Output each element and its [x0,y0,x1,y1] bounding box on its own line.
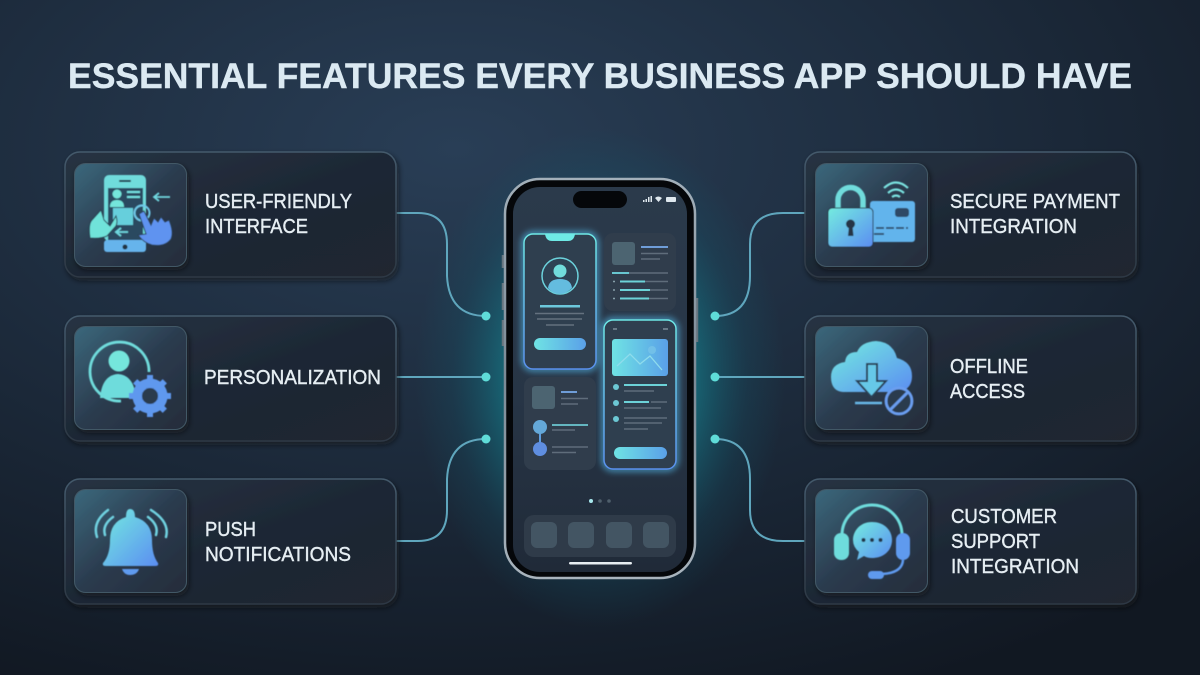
icon tile: user-friendly interface [74,164,186,266]
label: user-friendly interface: USER-FRIENDLY [205,190,352,213]
connector: secure payment [715,213,805,316]
phone body [505,179,695,578]
icon: cloud download offline [831,341,912,414]
panel: secure payment integration [805,152,1136,277]
connector lines [396,213,805,541]
label: user-friendly interface: INTERFACE [205,215,308,238]
ui card: contacts [524,377,596,470]
ui card: profile [524,234,596,369]
panel: offline access [805,316,1136,441]
phone screen [513,187,687,572]
label: push notifications [205,518,351,566]
label: secure payment integration [950,190,1120,238]
panel: customer support integration [805,479,1136,604]
label: offline access: OFFLINE [950,355,1028,378]
ui card: list [604,233,676,311]
connector: personalization [396,376,486,378]
connector: push notifications [396,439,486,541]
phone glow [415,128,785,628]
icon tile: secure payment [816,164,928,266]
label: personalization: PERSONALIZATION [204,366,381,389]
dynamic island [573,191,627,208]
panel: push notifications [65,479,396,604]
label: customer support integration [951,505,1079,578]
label: user-friendly interface [205,190,352,238]
label: offline access [950,355,1028,403]
icon: headset with chat bubble [834,505,910,579]
icon tile: offline access [816,326,928,430]
connector: user-friendly interface [396,213,486,316]
icon: lock and card [828,182,915,247]
page dots [589,499,611,503]
label: customer support integration: CUSTOMER [951,505,1057,528]
status icons [643,196,676,202]
phone side buttons [503,255,697,346]
icon: phone with tapping hands [89,175,172,252]
label: customer support integration: INTEGRATION [951,555,1079,578]
connector: customer support [715,439,805,541]
title: ESSENTIAL FEATURES EVERY BUSINESS APP SHOULD HAVE [68,56,1132,96]
panel: user-friendly interface [65,152,396,277]
label: offline access: ACCESS [950,380,1025,403]
icon tile: push notifications [74,490,186,592]
phone mockup [503,179,697,578]
icon: user with gear [90,342,171,417]
connector: offline access [715,376,805,378]
icon tile: personalization [74,326,186,430]
app dock [524,515,676,557]
icon tile: customer support [816,490,928,592]
panel: personalization [65,316,396,441]
ui card: gallery [604,320,676,469]
home bar [569,562,632,564]
icon: ringing bell [96,509,167,575]
connector dots [482,312,720,444]
label: secure payment integration: INTEGRATION [950,215,1077,238]
label: push notifications: NOTIFICATIONS [205,543,351,566]
label: push notifications: PUSH [205,518,256,541]
label: customer support integration: SUPPORT [951,530,1040,553]
label: secure payment integration: SECURE PAYMENT [950,190,1120,213]
